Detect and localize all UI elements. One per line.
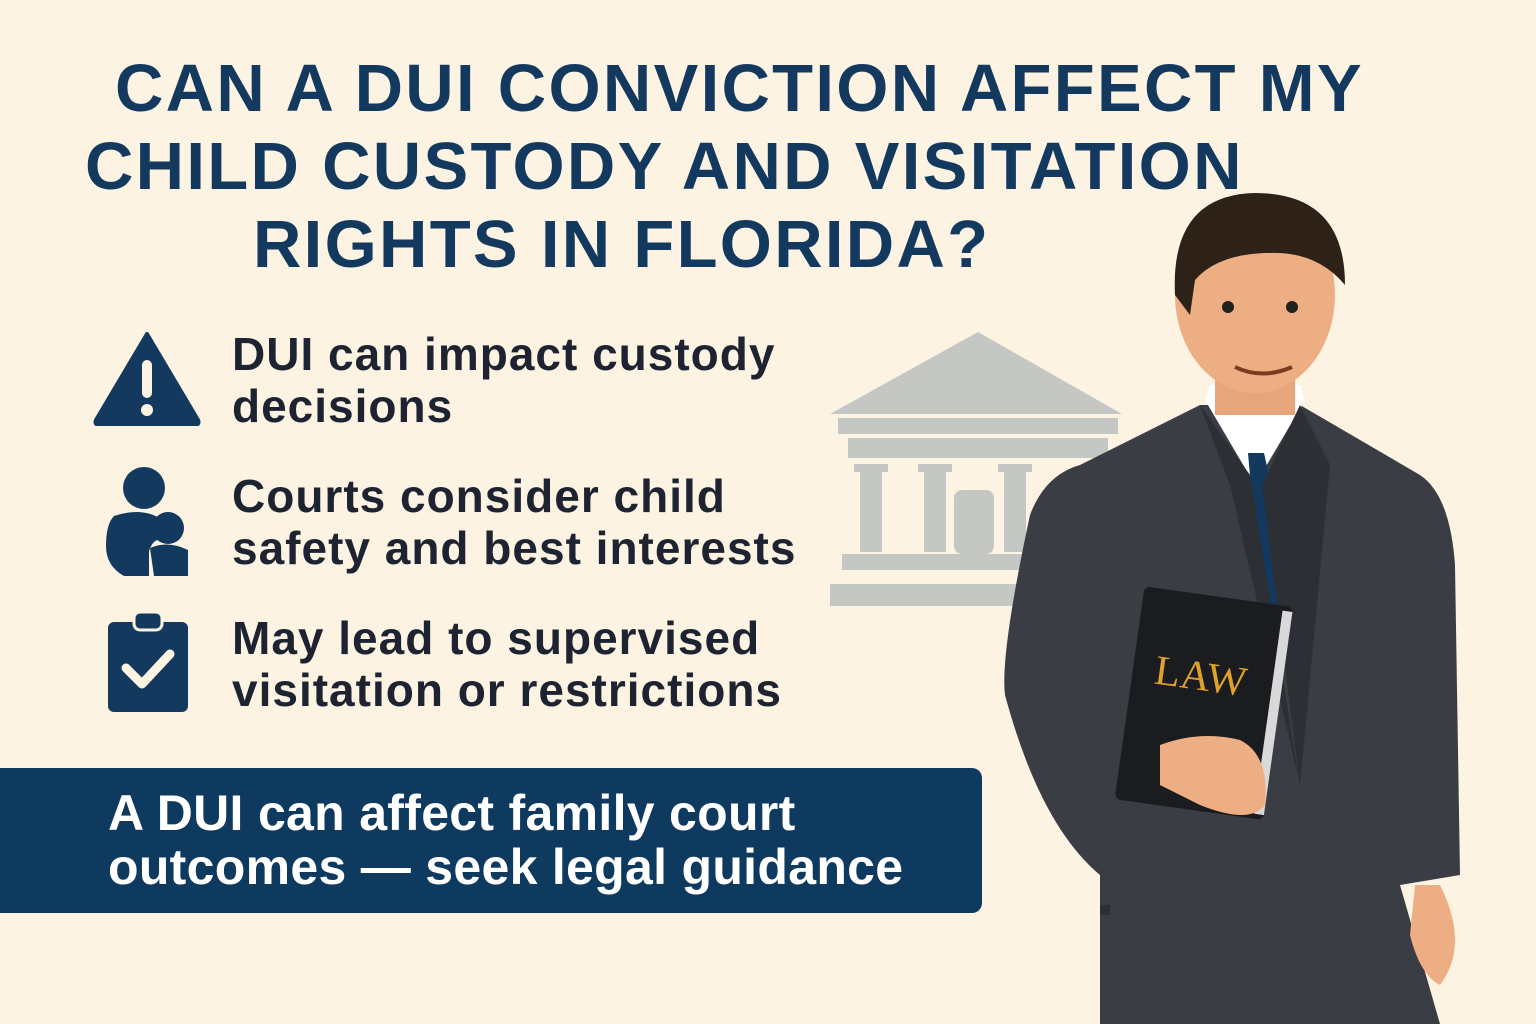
bullet 1: DUI can impact custody	[232, 328, 775, 380]
banner: outcomes — seek legal guidance	[108, 839, 903, 895]
bullet 1	[232, 328, 775, 432]
title	[85, 51, 1364, 282]
banner: A DUI can affect family court	[108, 785, 796, 841]
bullet 3	[232, 612, 782, 716]
icon: warning	[94, 332, 200, 426]
icon: parent and child	[106, 467, 188, 576]
man with law book	[1004, 193, 1460, 1024]
banner	[0, 768, 982, 913]
bullet 1: decisions	[232, 380, 453, 432]
icon: courthouse	[830, 332, 1122, 606]
title: CAN A DUI CONVICTION AFFECT MY	[115, 51, 1364, 126]
bullet 2: Courts consider child	[232, 470, 726, 522]
bullet 2	[232, 470, 796, 574]
bullet 3: May lead to supervised	[232, 612, 760, 664]
bullet 2: safety and best interests	[232, 522, 796, 574]
title: CHILD CUSTODY AND VISITATION	[85, 129, 1244, 204]
icon: clipboard check	[108, 614, 188, 712]
bullet 3: visitation or restrictions	[232, 664, 782, 716]
title: RIGHTS IN FLORIDA?	[253, 207, 990, 282]
man with law book: LAW	[1152, 648, 1250, 706]
